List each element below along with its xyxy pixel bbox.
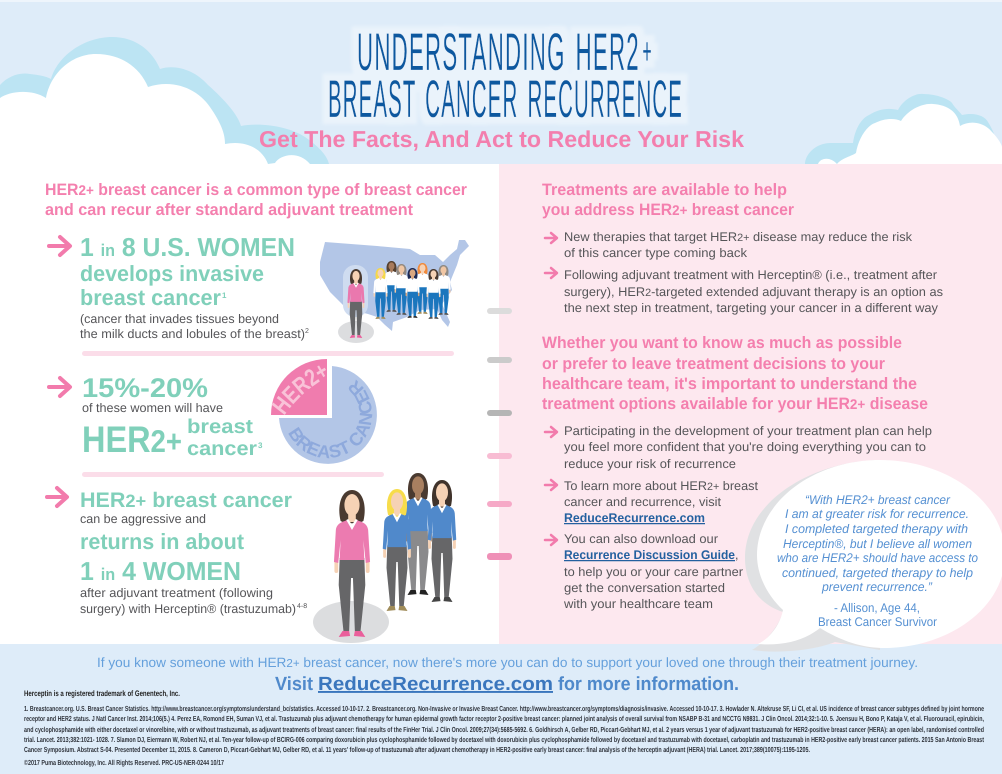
bullet: participating: reduce your risk of recurrence [564, 457, 736, 471]
arrow [545, 233, 557, 243]
arrow [545, 427, 557, 437]
stat: 15%-20% HER2+: 3 [258, 441, 263, 450]
divider [82, 351, 454, 356]
footer band [0, 644, 1002, 774]
arrow [545, 480, 557, 490]
speech bubble quote [745, 460, 1002, 652]
panel: left background [0, 164, 499, 644]
stat: 1 in 8 women: the milk ducts and lobules of the breast) [80, 327, 305, 341]
bullet: new therapies: of this cancer type coming back [564, 246, 748, 260]
bubble shadow [745, 460, 882, 652]
arrow [545, 268, 557, 278]
quote text: who are HER2+ should have access to [777, 551, 978, 565]
quote attribution: Breast Cancer Survivor [818, 615, 937, 629]
pie label: breast cancer: BREAST CANCER [288, 380, 372, 458]
bullet: discussion guide: with your healthcare team [563, 597, 713, 611]
stat: 1 in 4 women: after adjuvant treatment (following [80, 586, 273, 600]
bullet: discussion guide: You can also download our [564, 532, 718, 546]
stat: 1 in 8 women: develops invasive [80, 261, 264, 286]
map shape [320, 240, 469, 331]
treatments heading: Treatments are available to help [542, 181, 787, 199]
header band [0, 0, 1002, 164]
footer call to action [275, 674, 739, 695]
bullet: learn more: cancer and recurrence, visit [564, 495, 722, 509]
left heading [45, 181, 468, 219]
arrow [49, 237, 70, 255]
stat: 1 in 4 women [80, 489, 307, 616]
bullet: extended adjuvant therapy: surgery), HER2-targeted extended adjuvant therapy is an option as [564, 285, 943, 299]
panel: right column content [542, 181, 943, 611]
title: + [642, 31, 653, 73]
bullet: discussion guide: , [735, 548, 738, 562]
pie: breast cancer slice [279, 366, 377, 464]
quote attribution: - Allison, Age 44, [834, 601, 920, 615]
footer call to action: Visit [275, 674, 314, 695]
stat: 1 in 8 women: 1 [222, 291, 227, 300]
trademark note: Herceptin is a registered trademark of Genentech, Inc. [24, 689, 180, 698]
treatments heading: you address HER2+ breast cancer [542, 201, 795, 219]
bullet: participating [564, 424, 932, 471]
quote text: Herceptin®, but I believe all women [783, 537, 972, 551]
bullet: discussion guide: Recurrence Discussion Guide [564, 548, 735, 562]
whether heading: treatment options available for your HER2+ disease [542, 395, 928, 413]
map of United States with women [320, 240, 469, 343]
bullet: extended adjuvant therapy: the next step in treatment, targeting your cancer in a different way [564, 301, 939, 315]
pie: HER2+ slice [271, 359, 327, 415]
bullet: discussion guide: get the conversation started [564, 581, 725, 595]
quote text: “With HER2+ breast cancer [805, 493, 951, 507]
pie label: HER2+: HER2+ [272, 366, 326, 415]
bullet: participating: you feel more confident that you're doing everything you can to [564, 440, 926, 454]
bullet: learn more [564, 479, 759, 525]
stat: 1 in 4 women: 1 in 4 WOMEN [80, 556, 241, 586]
quote attribution [818, 601, 937, 629]
stat: 15%-20% HER2+: breast [187, 416, 253, 438]
quote text: continued, targeted therapy to help [782, 566, 973, 580]
stat: 1 in 4 women: HER2+ breast cancer [80, 489, 292, 512]
stat: 15%-20% HER2+: cancer [187, 438, 257, 460]
whether heading [542, 334, 928, 413]
footer call to action: ReduceRecurrence.com [318, 674, 553, 695]
left heading: and can recur after standard adjuvant treatment [45, 201, 413, 219]
bullet: extended adjuvant therapy [564, 268, 943, 315]
bullet: participating: Participating in the development of your treatment plan can help [564, 424, 932, 438]
stat: 15%-20% HER2+: HER2+ [82, 419, 182, 460]
bullet: learn more: ReduceRecurrence.com [564, 511, 705, 525]
illustration: group of four women [313, 473, 456, 643]
bullet: new therapies [564, 230, 913, 260]
divider [82, 472, 384, 477]
stat: 1 in 8 women: breast cancer [80, 285, 221, 310]
footer message: If you know someone with HER2+ breast cancer, now there's more you can do to support your loved one through their treatment journey. [97, 655, 918, 670]
bullet: new therapies: New therapies that target HER 2+ disease may reduce the risk [564, 230, 913, 244]
treatments heading [542, 181, 795, 219]
quote text: I am at greater risk for recurrence. [785, 507, 969, 521]
highlighted woman [338, 265, 374, 343]
quote text: I completed targeted therapy with [785, 522, 968, 536]
arrow [49, 378, 70, 396]
group of seven women [373, 261, 451, 319]
bullet: extended adjuvant therapy: Following adjuvant treatment with Herceptin® (i.e., treatment after [564, 268, 937, 282]
quote text [777, 493, 978, 594]
bullet: learn more: To learn more about HER2+ breast [564, 479, 759, 493]
bubble [757, 460, 1002, 648]
subtitle: Get The Facts, And Act to Reduce Your Risk [259, 126, 744, 152]
stat: 1 in 8 women: 2 [305, 328, 309, 335]
stat: 1 in 4 women: returns in about [80, 529, 245, 554]
bullet: discussion guide [563, 532, 743, 611]
panel: left column content [45, 181, 469, 643]
stat: 1 in 4 women: can be aggressive and [80, 512, 206, 526]
stat: 1 in 8 women: (cancer that invades tissues beyond [80, 312, 279, 326]
left clouds [0, 37, 329, 164]
arrow [545, 535, 557, 545]
bullet: discussion guide: to help you or your care partner [564, 565, 743, 579]
pie chart [271, 359, 377, 464]
timeline pills [487, 308, 512, 560]
arrow [47, 488, 67, 506]
stat: 15%-20% HER2+: of these women will have [82, 401, 223, 415]
left heading: HER2+ breast cancer is a common type of breast cancer [45, 181, 468, 199]
references [24, 704, 984, 754]
whether heading: healthcare team, it's important to understand the [542, 375, 917, 393]
quote text: prevent recurrence.” [821, 580, 933, 594]
whether heading: or prefer to leave treatment decisions to your [542, 355, 886, 373]
copyright: ©2017 Puma Biotechnology, Inc. All Rights Reserved. PRC-US-NER-0244 10/17 [24, 758, 224, 767]
stat: 1 in 4 women: surgery) with Herceptin® (trastuzumab) [80, 602, 296, 616]
title [328, 23, 683, 129]
stat: 15%-20% HER2+ [82, 373, 263, 460]
stat: 1 in 8 women: 1 in 8 U.S. WOMEN [80, 232, 295, 262]
footer call to action: for more information. [558, 674, 739, 695]
panel: right background [499, 164, 1002, 644]
stat: 1 in 8 women [80, 232, 309, 341]
whether heading: Whether you want to know as much as possible [542, 334, 902, 352]
stat: 15%-20% HER2+: 15%-20% [82, 373, 208, 403]
stat: 1 in 4 women: 4-8 [297, 603, 307, 610]
right clouds [805, 94, 1002, 164]
